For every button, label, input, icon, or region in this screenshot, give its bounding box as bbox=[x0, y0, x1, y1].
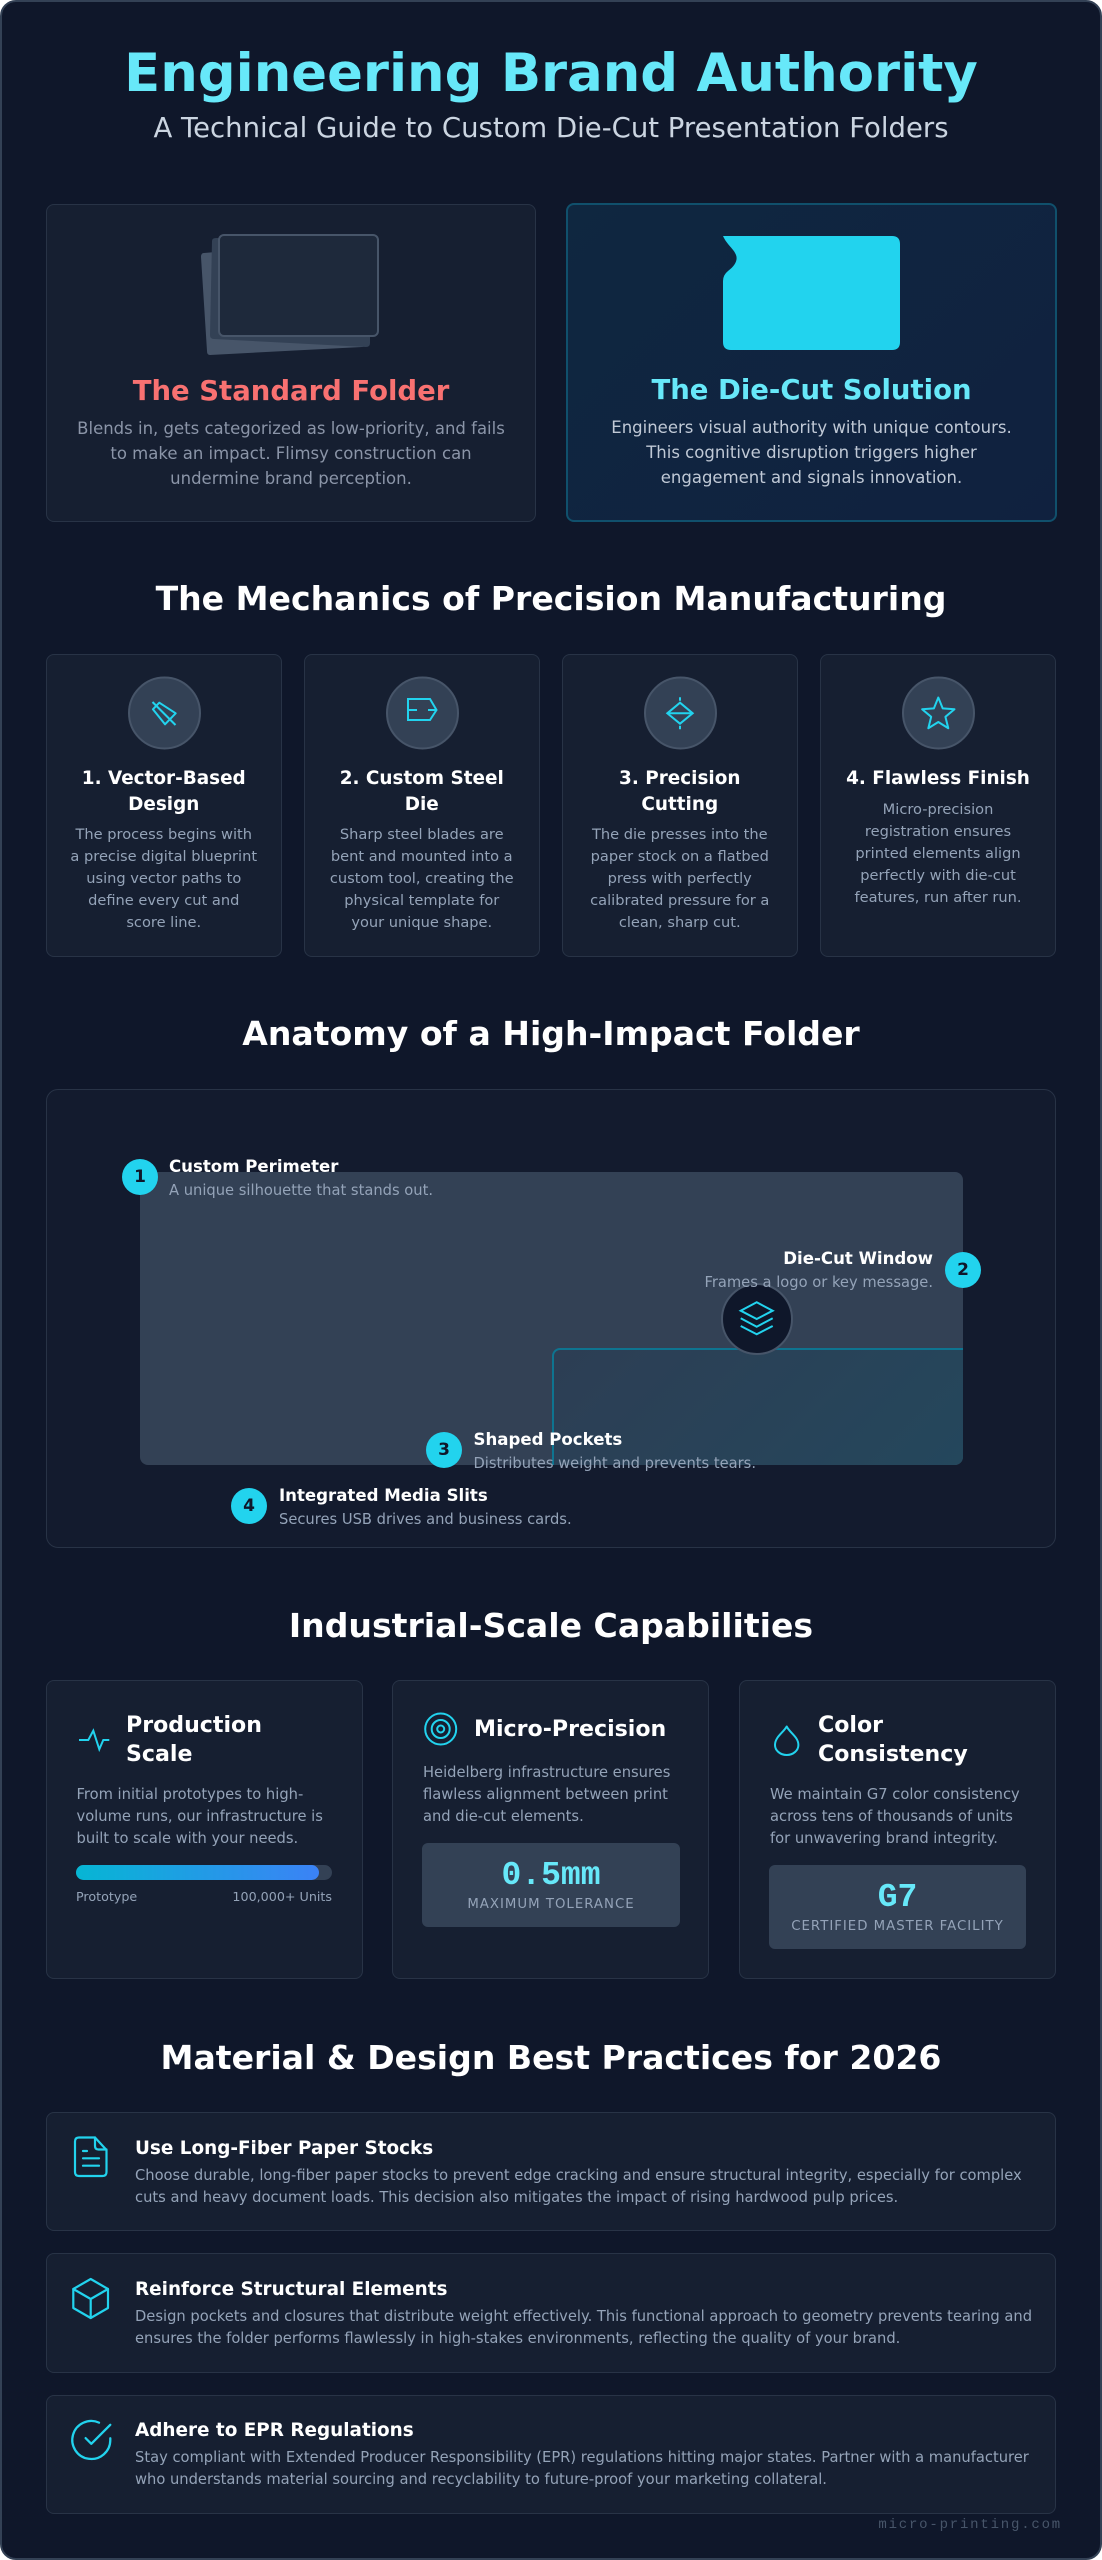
panel: the die-cut solution bbox=[566, 203, 1057, 522]
text: Design pockets and closures that distribute weight effectively. This functional approach to geometry prevents tearing and bbox=[135, 2308, 1032, 2325]
text: production scale: built to scale with your needs. bbox=[76, 1830, 298, 1847]
text bbox=[135, 2308, 1032, 2347]
heading: step 1: 1. Vector-Based bbox=[82, 768, 246, 788]
heading: step 2: 2. Custom Steel bbox=[340, 768, 504, 788]
heading: production scale: Production bbox=[126, 1712, 262, 1738]
callout 4 text: Integrated Media Slits bbox=[279, 1486, 488, 1505]
footer: source credit: micro-printing.com bbox=[878, 2517, 1062, 2533]
text: standard folder description: undermine brand perception. bbox=[170, 469, 412, 488]
heading: anatomy: Anatomy of a High-Impact Folder bbox=[242, 1014, 860, 1053]
text: ensures the folder performs flawlessly in high-stakes environments, reflecting the quality of your brand. bbox=[135, 2330, 900, 2347]
heading: color consistency bbox=[818, 1712, 968, 1767]
stat value: 0.5mm bbox=[501, 1857, 601, 1894]
text: micro-precision: and die-cut elements. bbox=[423, 1808, 584, 1825]
text: standard folder description: to make an impact. Flimsy construction can bbox=[110, 444, 472, 463]
panel: step 3 bbox=[562, 654, 798, 957]
text: step 2: bent and mounted into a bbox=[331, 848, 513, 865]
callout 3 text bbox=[474, 1430, 756, 1472]
panel: color consistency bbox=[739, 1680, 1056, 1979]
text: color consistency: across tens of thousands of units bbox=[770, 1808, 1013, 1825]
callout 4 text: Secures USB drives and business cards. bbox=[279, 1511, 572, 1528]
text: step 1 bbox=[70, 826, 257, 931]
heading: Use Long-Fiber Paper Stocks bbox=[135, 2138, 433, 2159]
heading: Adhere to EPR Regulations bbox=[135, 2420, 414, 2441]
folder pocket bbox=[552, 1348, 963, 1465]
text bbox=[135, 2167, 1022, 2206]
heading: color consistency: Color bbox=[818, 1712, 883, 1738]
stat caption: CERTIFIED MASTER FACILITY bbox=[791, 1919, 1004, 1934]
callout 4: integrated media slits bbox=[231, 1486, 572, 1528]
text: production scale: volume runs, our infrastructure is bbox=[76, 1808, 323, 1825]
progress bar bbox=[76, 1865, 332, 1880]
text: step 4: printed elements align bbox=[855, 844, 1021, 862]
callout 1 text: A unique silhouette that stands out. bbox=[169, 1182, 433, 1199]
heading: step 2 bbox=[340, 768, 504, 814]
heading: step 3: 3. Precision bbox=[619, 768, 740, 788]
text: step 1: using vector paths to bbox=[86, 870, 241, 887]
text: micro-precision bbox=[423, 1764, 670, 1825]
heading: step 2: Die bbox=[405, 794, 439, 814]
text: step 2: custom tool, creating the bbox=[330, 870, 514, 887]
text: production scale: From initial prototypes to high- bbox=[76, 1786, 303, 1803]
text: micro-precision: flawless alignment between print bbox=[423, 1786, 668, 1803]
stat caption: MAXIMUM TOLERANCE bbox=[467, 1897, 635, 1912]
text: step 4: registration ensures bbox=[865, 822, 1011, 840]
text: step 1: define every cut and bbox=[88, 892, 239, 909]
panel: anatomy diagram bbox=[46, 1089, 1056, 1548]
panel: long-fiber paper bbox=[46, 2112, 1056, 2231]
text: micro-precision: Heidelberg infrastructure ensures bbox=[423, 1764, 670, 1781]
text: step 1: The process begins with bbox=[75, 826, 252, 843]
stat box: tolerance bbox=[422, 1843, 680, 1927]
text: step 3: clean, sharp cut. bbox=[619, 914, 741, 931]
stat value: G7 bbox=[878, 1879, 917, 1916]
panel: structural elements bbox=[46, 2253, 1056, 2373]
bar label: units: 100,000+ Units bbox=[232, 1889, 332, 1904]
progress fill bbox=[76, 1865, 319, 1880]
callout 2 text: Frames a logo or key message. bbox=[704, 1274, 933, 1291]
heading: production scale: Scale bbox=[126, 1741, 192, 1767]
callout 2 text: Die-Cut Window bbox=[783, 1249, 933, 1268]
text: cuts and heavy document loads. This decision also mitigates the impact of rising hardwood pulp prices. bbox=[135, 2189, 898, 2206]
heading: capabilities: Industrial-Scale Capabilities bbox=[289, 1606, 813, 1645]
panel: micro-precision bbox=[392, 1680, 709, 1979]
callout 1 text bbox=[169, 1157, 433, 1199]
badge 2: 2 bbox=[957, 1260, 969, 1280]
text: step 2: your unique shape. bbox=[351, 914, 492, 931]
subtitle: A Technical Guide to Custom Die-Cut Presentation Folders bbox=[153, 112, 949, 144]
text: step 3 bbox=[590, 826, 769, 931]
stat box: G7 bbox=[769, 1865, 1026, 1949]
text: die-cut description: Engineers visual authority with unique contours. bbox=[611, 418, 1012, 436]
heading: Reinforce Structural Elements bbox=[135, 2279, 448, 2300]
text: step 4: features, run after run. bbox=[854, 888, 1022, 906]
heading: color consistency: Consistency bbox=[818, 1741, 968, 1767]
badge 3: 3 bbox=[438, 1440, 450, 1460]
text: Stay compliant with Extended Producer Responsibility (EPR) regulations hitting major states. Partner with a manufacturer bbox=[135, 2449, 1029, 2466]
text: step 3: press with perfectly bbox=[608, 870, 752, 887]
text: color consistency bbox=[770, 1786, 1020, 1847]
text: step 2 bbox=[330, 826, 514, 931]
heading: micro-precision: Micro-Precision bbox=[474, 1716, 666, 1742]
text: step 4 bbox=[854, 800, 1022, 906]
bar label: prototype: Prototype bbox=[76, 1889, 137, 1904]
callout 1 text: Custom Perimeter bbox=[169, 1157, 338, 1176]
heading: step 3: Cutting bbox=[641, 794, 718, 814]
panel: step 1 bbox=[46, 654, 282, 957]
title: Engineering Brand Authority bbox=[124, 43, 978, 104]
text: step 2: Sharp steel blades are bbox=[340, 826, 504, 843]
text: color consistency: for unwavering brand integrity. bbox=[770, 1830, 998, 1847]
panel: step 4 bbox=[820, 654, 1056, 957]
callout 4 text bbox=[279, 1486, 572, 1528]
text: who understands material sourcing and recyclability to future-proof your marketing collateral. bbox=[135, 2471, 827, 2488]
text: step 3: paper stock on a flatbed bbox=[591, 848, 769, 865]
badge 1: 1 bbox=[134, 1167, 146, 1187]
panel: EPR regulations bbox=[46, 2395, 1056, 2514]
callout 2: die-cut window bbox=[704, 1249, 981, 1291]
text: step 3: calibrated pressure for a bbox=[590, 892, 769, 909]
heading: step 3 bbox=[619, 768, 740, 814]
text: step 1: score line. bbox=[126, 914, 201, 931]
badge 2 bbox=[945, 1252, 981, 1288]
text: step 1: a precise digital blueprint bbox=[70, 848, 257, 865]
heading: step 1 bbox=[82, 768, 246, 814]
panel: step 2 bbox=[304, 654, 540, 957]
text: production scale bbox=[76, 1786, 323, 1847]
panel: the standard folder bbox=[46, 204, 536, 522]
badge 4 bbox=[231, 1488, 267, 1524]
badge 4: 4 bbox=[243, 1496, 255, 1516]
text: step 4: Micro-precision bbox=[883, 800, 993, 818]
callout 1: custom perimeter bbox=[122, 1157, 433, 1199]
text: standard folder description: Blends in, gets categorized as low-priority, and fails bbox=[77, 418, 505, 438]
callout 3 text: Distributes weight and prevents tears. bbox=[474, 1455, 756, 1472]
folder body bbox=[140, 1172, 963, 1465]
text: step 2: physical template for bbox=[344, 892, 499, 909]
badge 3 bbox=[426, 1432, 462, 1468]
text bbox=[135, 2449, 1029, 2488]
text: standard folder description bbox=[77, 418, 505, 488]
text: die-cut description: engagement and signals innovation. bbox=[661, 468, 962, 487]
callout 3: shaped pockets bbox=[426, 1430, 756, 1472]
heading: step 1: Design bbox=[128, 794, 199, 814]
text: step 3: The die presses into the bbox=[592, 826, 768, 843]
heading: best practices: Material & Design Best Practices for 2026 bbox=[161, 2038, 941, 2077]
panel: production scale bbox=[46, 1680, 363, 1979]
text: color consistency: We maintain G7 color consistency bbox=[770, 1786, 1020, 1803]
badge 1 bbox=[122, 1159, 158, 1195]
text: die-cut description bbox=[611, 418, 1012, 487]
heading: standard folder: The Standard Folder bbox=[133, 375, 449, 407]
text: Choose durable, long-fiber paper stocks to prevent edge cracking and ensure structural integrity, especially for complex bbox=[135, 2167, 1022, 2184]
heading: production scale bbox=[126, 1712, 262, 1767]
text: die-cut description: This cognitive disruption triggers higher bbox=[646, 443, 977, 462]
callout 2 text bbox=[704, 1249, 933, 1291]
callout 3 text: Shaped Pockets bbox=[474, 1430, 622, 1449]
heading: die-cut solution: The Die-Cut Solution bbox=[651, 374, 972, 406]
heading: step 4: 4. Flawless Finish bbox=[846, 768, 1030, 788]
text: step 4: perfectly with die-cut bbox=[860, 866, 1016, 884]
heading: mechanics: The Mechanics of Precision Manufacturing bbox=[156, 579, 946, 618]
